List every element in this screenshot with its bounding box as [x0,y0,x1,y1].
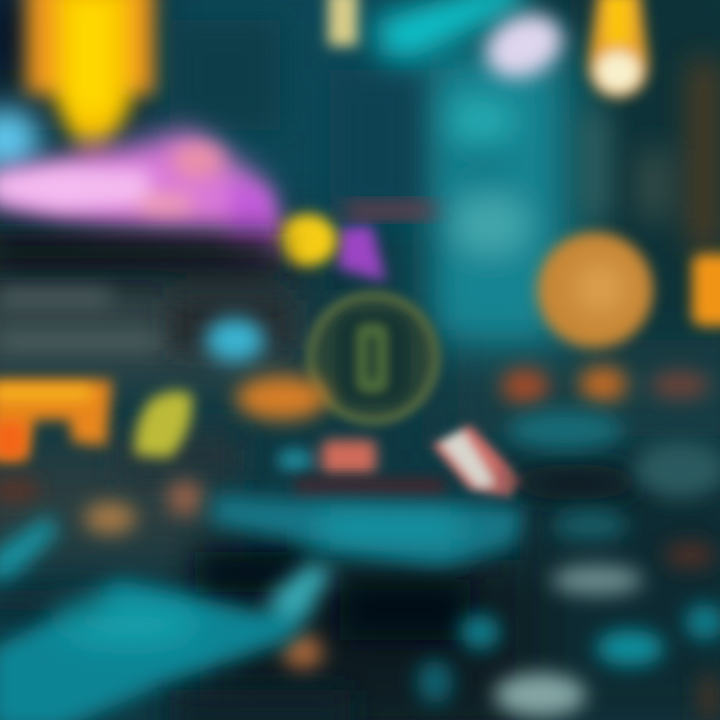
sign: pink block [277,440,376,474]
platform: teal central table [195,464,645,640]
blob: white lavender [475,2,573,90]
coin: orange sphere [537,232,653,348]
blob: orange centre [236,376,328,420]
banner: yellow hanging lantern [26,0,154,164]
platform: teal bottom left [0,515,350,720]
sign: yellow glow [279,214,337,266]
bar: dark red strip [295,478,445,498]
cyan strip at top [375,0,525,60]
light: orange right edge [692,254,720,326]
lamp: pale yellow top centre [328,0,358,46]
blob: yellow green [135,391,192,458]
lamp: yellow and white top right [588,0,648,98]
band: pink and purple neon sign [0,130,386,282]
tower: teal building [170,20,545,330]
shapes: teal and pale lower right [417,410,720,720]
coin: dark olive circle [305,290,441,426]
red strip [345,203,435,217]
grey shelves [0,290,160,347]
dark window columns at right [0,0,720,250]
small orange spots [0,366,716,670]
dark band under sign [0,234,290,480]
band: blue left glow [0,108,40,172]
sign: orange band left [0,380,112,460]
sign: striped white and red [432,425,522,498]
blob: cyan light [205,318,265,362]
